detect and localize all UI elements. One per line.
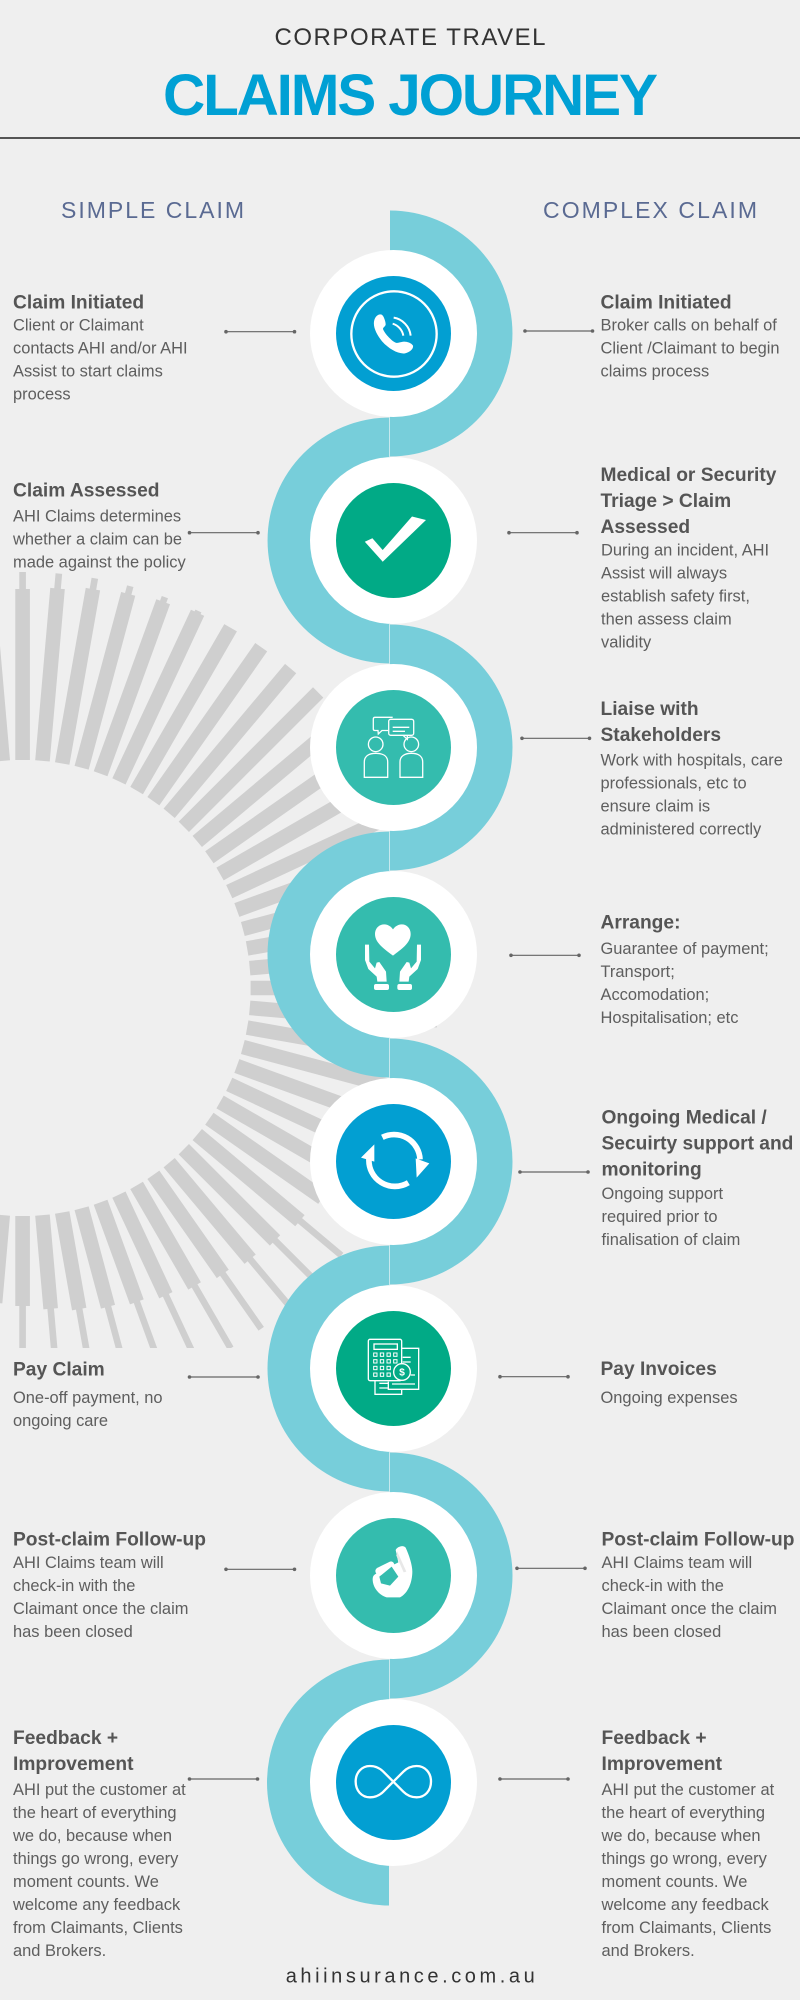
simple claim: claim assessed: AHI Claims determines	[13, 508, 181, 526]
simple claim: claim initiated	[13, 292, 188, 404]
simple claim: claim initiated: Claim Initiated	[13, 292, 144, 313]
complex claim: medical or security triage: Assessed	[600, 517, 690, 538]
complex claim: ongoing support: Ongoing support	[602, 1185, 723, 1203]
simple claim: feedback and improvement: we do, because when	[12, 1827, 172, 1845]
complex claim: post-claim follow-up: has been closed	[602, 1623, 721, 1641]
complex claim: pay invoices	[600, 1359, 738, 1407]
title: claims journey: CLAIMS JOURNEY	[163, 63, 658, 128]
complex claim: claim initiated: Client /Claimant to begin	[600, 340, 780, 358]
step 2 circle: check icon	[310, 457, 477, 624]
complex claim: medical or security triage: Triage > Claim	[600, 491, 731, 512]
step 5 circle: refresh icon	[310, 1078, 477, 1245]
complex claim: arrange: Arrange:	[600, 912, 680, 933]
step 7 circle: ok hand icon	[310, 1492, 477, 1659]
complex claim: liaise with stakeholders: ensure claim is	[600, 798, 710, 816]
complex claim: medical or security triage: then assess claim	[601, 611, 732, 629]
simple claim: pay claim	[13, 1360, 163, 1430]
simple claim: claim assessed	[12, 481, 186, 572]
complex claim: feedback and improvement: and Brokers.	[602, 1942, 695, 1960]
complex claim: arrange: Guarantee of payment;	[600, 940, 769, 958]
complex claim: post-claim follow-up: Claimant once the claim	[602, 1600, 777, 1618]
complex claim: feedback and improvement: moment counts. We	[602, 1873, 747, 1891]
complex claim: pay invoices: Ongoing expenses	[600, 1389, 738, 1407]
complex claim: liaise with stakeholders: professionals, etc to	[600, 775, 747, 793]
simple claim: claim initiated: Client or Claimant	[13, 317, 144, 335]
simple claim: feedback and improvement: from Claimants, Clients	[13, 1919, 183, 1937]
complex claim: feedback and improvement	[600, 1728, 775, 1960]
simple claim: feedback and improvement: AHI put the customer at	[13, 1781, 186, 1799]
step 6 circle: calculator and invoice icon: $	[399, 1368, 405, 1379]
left connectors	[188, 330, 296, 1780]
simple claim: pay claim: One-off payment, no	[13, 1389, 163, 1407]
complex claim: pay invoices: Pay Invoices	[600, 1359, 717, 1380]
simple claim: claim initiated: Assist to start claims	[13, 363, 163, 381]
simple claim: feedback and improvement: moment counts. We	[13, 1873, 159, 1891]
complex claim: ongoing support	[602, 1107, 793, 1249]
column heading: complex claim: COMPLEX CLAIM	[543, 197, 757, 223]
simple claim: feedback and improvement: welcome any feedback	[12, 1896, 181, 1914]
simple claim: claim assessed: whether a claim can be	[12, 531, 182, 549]
complex claim: claim initiated	[600, 292, 780, 381]
complex claim: feedback and improvement: AHI put the customer at	[602, 1781, 775, 1799]
complex claim: ongoing support: Ongoing Medical /	[602, 1107, 767, 1128]
simple claim: post-claim follow-up: Claimant once the claim	[13, 1600, 188, 1618]
simple claim: pay claim: Pay Claim	[13, 1360, 105, 1381]
simple claim: claim initiated: contacts AHI and/or AHI	[13, 340, 188, 358]
complex claim: post-claim follow-up: check-in with the	[602, 1577, 724, 1595]
complex claim: feedback and improvement: we do, because when	[600, 1827, 761, 1845]
complex claim: medical or security triage: During an incident, AHI	[601, 542, 769, 560]
complex claim: claim initiated: claims process	[600, 363, 709, 381]
background radial sunburst	[0, 572, 439, 1404]
complex claim: claim initiated: Broker calls on behalf of	[600, 317, 777, 335]
simple claim: post-claim follow-up: Post-claim Follow-up	[13, 1530, 206, 1551]
simple claim: post-claim follow-up: check-in with the	[13, 1577, 135, 1595]
step 4 circle: heart in hands icon	[310, 871, 477, 1038]
complex claim: ongoing support: Secuirty support and	[602, 1133, 793, 1154]
complex claim: medical or security triage: establish safety first,	[601, 588, 750, 606]
simple claim: post-claim follow-up: AHI Claims team will	[13, 1554, 164, 1572]
complex claim: ongoing support: required prior to	[602, 1208, 718, 1226]
simple claim: claim assessed: Claim Assessed	[13, 481, 159, 502]
complex claim: medical or security triage: validity	[601, 634, 652, 652]
complex claim: post-claim follow-up: Post-claim Follow-up	[602, 1530, 794, 1551]
step 1 circle: phone icon	[310, 250, 477, 417]
simple claim: feedback and improvement	[12, 1728, 186, 1960]
complex claim: arrange: Transport;	[600, 963, 675, 981]
complex claim: ongoing support: finalisation of claim	[602, 1231, 740, 1249]
complex claim: feedback and improvement: the heart of everything	[602, 1804, 765, 1822]
complex claim: feedback and improvement: Improvement	[602, 1754, 723, 1775]
complex claim: liaise with stakeholders: Liaise with	[600, 699, 699, 720]
simple claim: feedback and improvement: and Brokers.	[13, 1942, 106, 1960]
simple claim: feedback and improvement: things go wrong, every	[13, 1850, 179, 1868]
complex claim: liaise with stakeholders: administered correctly	[600, 821, 762, 839]
footer: website: ahiinsurance.com.au	[286, 1966, 535, 1988]
simple claim: post-claim follow-up: has been closed	[13, 1623, 133, 1641]
complex claim: feedback and improvement: Feedback +	[602, 1728, 707, 1749]
complex claim: feedback and improvement: things go wrong, every	[602, 1850, 768, 1868]
complex claim: feedback and improvement: from Claimants, Clients	[602, 1919, 771, 1937]
simple claim: post-claim follow-up	[13, 1530, 206, 1641]
complex claim: liaise with stakeholders	[600, 699, 783, 839]
right connectors	[499, 330, 594, 1780]
step 3 circle: stakeholders icon	[310, 664, 477, 831]
simple claim: feedback and improvement: Improvement	[13, 1754, 134, 1775]
complex claim: medical or security triage	[600, 465, 777, 652]
simple claim: feedback and improvement: Feedback +	[13, 1728, 118, 1749]
complex claim: arrange: Hospitalisation; etc	[600, 1009, 738, 1027]
column heading: simple claim: SIMPLE CLAIM	[61, 197, 244, 223]
complex claim: medical or security triage: Medical or Security	[600, 465, 777, 486]
complex claim: liaise with stakeholders: Stakeholders	[600, 725, 721, 746]
complex claim: post-claim follow-up: AHI Claims team will	[602, 1554, 752, 1572]
complex claim: post-claim follow-up	[602, 1530, 794, 1641]
simple claim: claim initiated: process	[13, 386, 71, 404]
complex claim: ongoing support: monitoring	[602, 1159, 702, 1180]
ribbon: winding teal path	[267, 210, 512, 1906]
step 6 circle: calculator and invoice icon	[310, 1285, 477, 1452]
complex claim: medical or security triage: Assist will always	[601, 565, 727, 583]
complex claim: liaise with stakeholders: Work with hospitals, care	[600, 752, 783, 770]
complex claim: claim initiated: Claim Initiated	[600, 292, 732, 313]
complex claim: arrange	[600, 912, 769, 1027]
complex claim: feedback and improvement: welcome any feedback	[600, 1896, 769, 1914]
simple claim: feedback and improvement: the heart of everything	[13, 1804, 177, 1822]
simple claim: claim assessed: made against the policy	[13, 554, 186, 572]
simple claim: pay claim: ongoing care	[13, 1412, 108, 1430]
complex claim: arrange: Accomodation;	[600, 986, 709, 1004]
heading: corporate travel: CORPORATE TRAVEL	[274, 24, 546, 51]
step 8 circle: infinity icon	[310, 1699, 477, 1866]
